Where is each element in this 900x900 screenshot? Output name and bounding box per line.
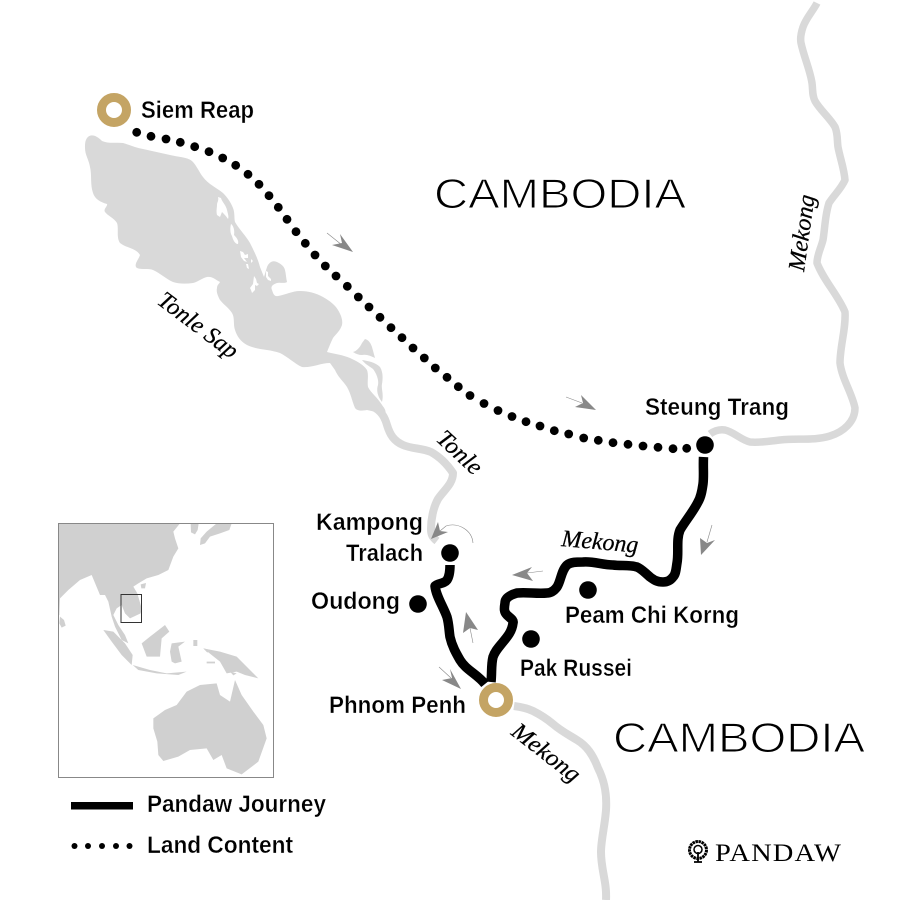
label: Siem Reap: Siem Reap (141, 97, 254, 124)
arrow: toward Phnom Penh (439, 667, 461, 689)
locator rectangle (121, 594, 142, 622)
marker: Phnom Penh (484, 688, 508, 712)
stop: Peam Chi Korng (579, 581, 597, 599)
label: Kampong Tralach: Tralach (346, 540, 423, 567)
arrow: downstream (700, 525, 715, 555)
legend: journey label: Pandaw Journey (147, 791, 327, 818)
label: Steung Trang: Steung Trang (645, 394, 789, 421)
cruise route: Phnom Penh to Kampong Tralach (435, 565, 485, 684)
arrow: upstream (463, 612, 478, 643)
legend: land label: Land Content (147, 832, 293, 859)
marker: Siem Reap (102, 98, 126, 122)
river: Mekong south (514, 706, 606, 900)
river label: Mekong east: Mekong (784, 193, 821, 274)
label: Kampong Tralach (316, 509, 423, 567)
stop: Steung Trang (696, 436, 714, 454)
lake: Tonle Sap (85, 135, 386, 414)
arrow: land route 1 (327, 233, 353, 252)
cruise route: Steung Trang to Phnom Penh (491, 457, 704, 682)
label: Phnom Penh: Phnom Penh (329, 692, 466, 719)
inset locator map (58, 523, 274, 778)
river label: Tonle: Tonle (431, 425, 488, 481)
label: Kampong Tralach: Kampong (316, 509, 423, 536)
label: Peam Chi Korng: Peam Chi Korng (565, 602, 739, 629)
river: Tonle (372, 406, 453, 541)
arrow: turn at Kampong Tralach (431, 522, 473, 543)
stop: Pak Russei (522, 630, 540, 648)
label: Oudong: Oudong (311, 588, 400, 615)
wordmark: PANDAW (715, 838, 842, 867)
label: Pak Russei: Pak Russei (520, 655, 632, 682)
stop: Kampong Tralach (441, 544, 459, 562)
legend: land dots (72, 843, 132, 849)
legend: journey line (71, 802, 133, 810)
legend (71, 791, 327, 859)
arrow: westward on Mekong (512, 567, 543, 581)
river label: Mekong centre: Mekong (559, 526, 639, 559)
label: CAMBODIA north: CAMBODIA (434, 170, 686, 217)
dotted land route (132, 128, 691, 453)
river label: Tonle Sap: Tonle Sap (152, 287, 243, 364)
river: Mekong north (710, 3, 855, 442)
logo: Pandaw (690, 838, 842, 867)
river label: Mekong south: Mekong (505, 718, 585, 788)
icon: peacock (690, 842, 706, 862)
arrow: land route 2 (566, 395, 596, 410)
label: CAMBODIA south: CAMBODIA (613, 714, 865, 761)
stop: Oudong (409, 595, 427, 613)
